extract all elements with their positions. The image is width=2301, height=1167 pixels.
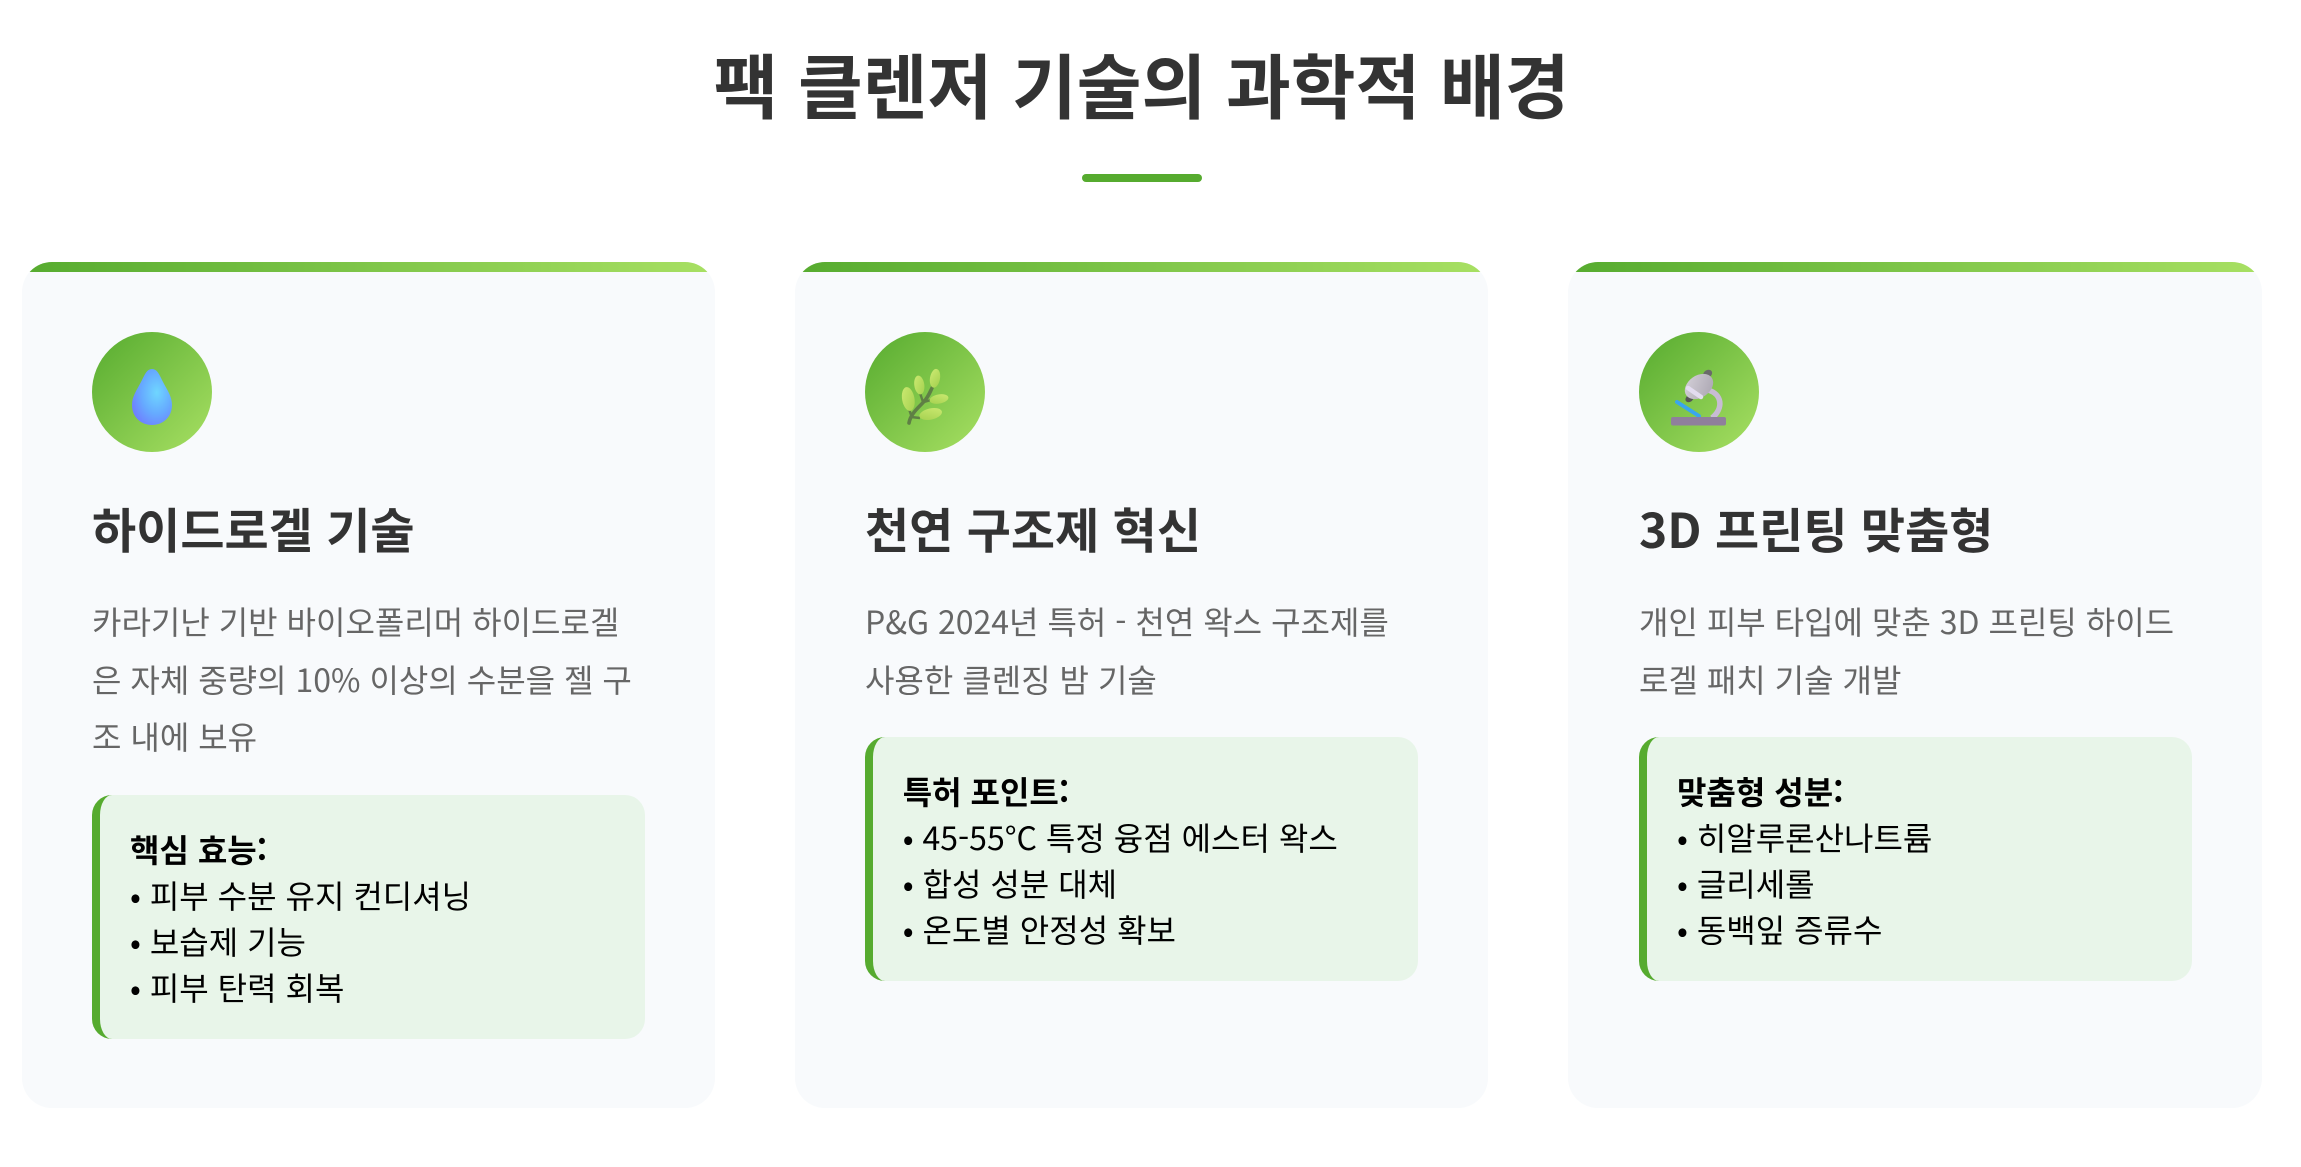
callout: custom ingredients: • 동백잎 증류수: [1677, 906, 1882, 952]
card description: P&G 2024년 특허 - 천연 왁스 구조제를: [865, 598, 1389, 644]
callout: key effects: [92, 795, 645, 1039]
card description: [92, 598, 632, 759]
callout: patent points: • 합성 성분 대체: [903, 860, 1117, 906]
card top gradient bar: [22, 262, 715, 272]
icon: water drop: [92, 332, 212, 452]
card description: 로겔 패치 기술 개발: [1639, 656, 1901, 702]
callout: key effects: • 보습제 기능: [130, 918, 306, 964]
icon: herb sprig: [865, 332, 985, 452]
callout: custom ingredients: • 글리세롤: [1677, 860, 1815, 906]
card description: [865, 598, 1389, 702]
panel: natural structurant innovation: [795, 262, 1488, 1108]
card heading: 3D 프린팅 맞춤형: [1639, 492, 1993, 562]
card description: [1639, 598, 2174, 702]
card description: 조 내에 보유: [92, 713, 257, 759]
callout: patent points: • 온도별 안정성 확보: [903, 906, 1176, 952]
panel: 3D printing customization: [1568, 262, 2262, 1108]
card description: 개인 피부 타입에 맞춘 3D 프린팅 하이드: [1639, 598, 2174, 644]
card description: 은 자체 중량의 10% 이상의 수분을 젤 구: [92, 656, 632, 702]
callout: patent points: • 45-55°C 특정 융점 에스터 왁스: [903, 814, 1338, 860]
callout: key effects: 핵심 효능:: [130, 826, 267, 872]
callout: custom ingredients: • 히알루론산나트륨: [1677, 814, 1932, 860]
callout: patent points: [865, 737, 1418, 981]
callout: patent points: 특허 포인트:: [903, 768, 1069, 814]
callout: custom ingredients: [1639, 737, 2192, 981]
icon: microscope: [1639, 332, 1759, 452]
callout: key effects: • 피부 수분 유지 컨디셔닝: [130, 872, 471, 918]
panel: hydrogel technology: [22, 262, 715, 1108]
card description: 카라기난 기반 바이오폴리머 하이드로겔: [92, 598, 619, 644]
card description: 사용한 클렌징 밤 기술: [865, 656, 1157, 702]
callout: key effects: • 피부 탄력 회복: [130, 964, 344, 1010]
title: 팩 클렌저 기술의 과학적 배경: [714, 32, 1569, 134]
title underline: [1082, 174, 1202, 182]
card heading: 하이드로겔 기술: [92, 492, 415, 562]
callout: custom ingredients: 맞춤형 성분:: [1677, 768, 1844, 814]
card top gradient bar: [795, 262, 1488, 272]
card heading: 천연 구조제 혁신: [865, 492, 1201, 562]
card top gradient bar: [1568, 262, 2262, 272]
